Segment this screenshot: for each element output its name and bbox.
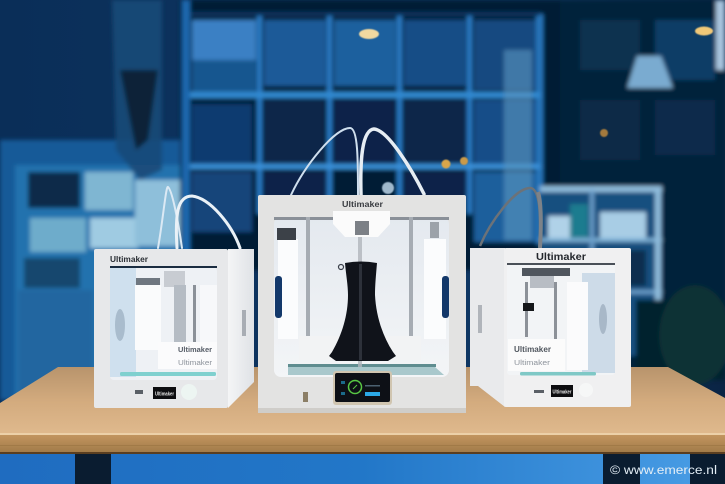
lights <box>359 26 713 194</box>
USB port <box>303 392 308 402</box>
side panel <box>228 249 254 408</box>
control panel <box>153 387 176 399</box>
filament box <box>158 342 217 369</box>
filament box <box>508 339 565 371</box>
gantry and head <box>522 268 570 276</box>
watermark: © www.emerce.nl <box>610 465 717 477</box>
right dark room <box>560 0 725 370</box>
chamber <box>507 263 615 375</box>
table top <box>0 367 725 454</box>
filament tubes <box>158 187 240 248</box>
printer: left Ultimaker 3 <box>94 187 254 408</box>
chamber <box>274 217 449 377</box>
touch display <box>333 371 392 405</box>
central axis <box>358 217 362 367</box>
chamber <box>110 267 217 380</box>
wall art left <box>0 140 180 400</box>
printer: right Ultimaker 2+: Ultimaker <box>552 390 572 396</box>
side panel <box>470 248 505 407</box>
shelves right <box>540 186 662 356</box>
logo: Ultimaker <box>536 252 586 263</box>
side handles <box>275 276 282 318</box>
front frame <box>94 249 228 408</box>
window frame <box>180 0 560 270</box>
logo: Ultimaker <box>110 255 148 264</box>
printer: left Ultimaker 3: Ultimaker <box>155 392 175 398</box>
control panel <box>551 385 573 397</box>
bowden tube <box>480 188 540 248</box>
table legs and under-table wall <box>0 440 725 484</box>
printer: right Ultimaker 2+: Ultimaker <box>514 345 551 354</box>
front frame <box>504 248 631 407</box>
logo: Ultimaker <box>342 199 384 209</box>
pendant lamp <box>627 56 673 88</box>
build plate <box>520 372 596 376</box>
printer: right Ultimaker 2+ <box>470 188 631 407</box>
build plate <box>120 372 216 376</box>
print head <box>110 266 217 268</box>
filament tubes <box>291 128 424 195</box>
print head <box>333 211 390 237</box>
printed black vase <box>329 262 396 361</box>
mullions <box>182 0 190 260</box>
build plate base <box>299 336 421 360</box>
printer: right Ultimaker 2+: Ultimaker <box>514 360 551 367</box>
printer: left Ultimaker 3: Ultimaker <box>178 345 212 354</box>
printer: left Ultimaker 3: Ultimaker <box>178 360 213 367</box>
outer frame <box>258 195 466 413</box>
printer: centre Ultimaker S5 <box>258 128 466 413</box>
